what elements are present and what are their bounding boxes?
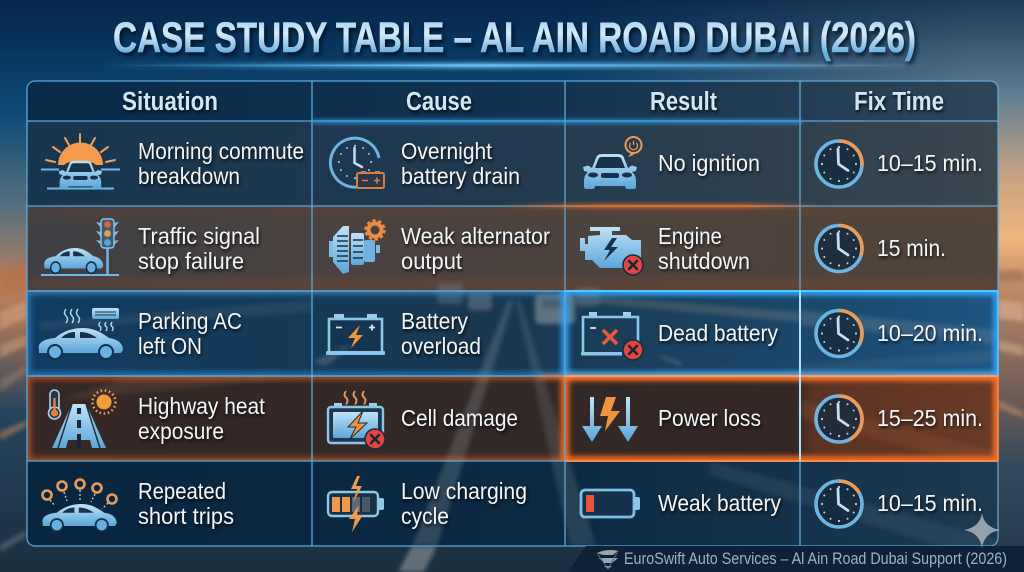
table body text: cycle — [401, 503, 449, 529]
row 3 blue glow — [27, 291, 998, 376]
table body text: Parking AC — [138, 308, 242, 334]
column headers: Situation — [122, 88, 218, 116]
table body text: breakdown — [138, 163, 240, 189]
table body text: Weak alternator — [401, 223, 550, 249]
table body text: Dead battery — [658, 320, 778, 346]
icon: dead battery — [581, 312, 643, 360]
icon: car with parking AC — [39, 308, 123, 359]
icon: clock 10–15 min bottom — [816, 481, 862, 527]
icon: highway heat — [48, 390, 116, 448]
highlight glow lines — [312, 120, 999, 462]
table body text: Low charging — [401, 478, 527, 504]
icon: clock 10–20 min — [816, 310, 862, 356]
icon: sunrise car — [41, 134, 120, 189]
table body text: Cell damage — [401, 405, 518, 431]
table body text: Morning commute — [138, 138, 304, 164]
icon: low charging battery — [328, 476, 384, 532]
table body text: shutdown — [658, 248, 750, 274]
table body text: 10–15 min. — [877, 490, 983, 516]
row 4 orange glow — [27, 376, 998, 461]
icon: power loss arrows — [582, 397, 638, 442]
table body text: 15 min. — [877, 235, 946, 261]
table body text: overload — [401, 333, 481, 359]
icon: overloaded battery — [326, 314, 385, 355]
footer band — [568, 546, 1024, 572]
table row backgrounds — [27, 81, 998, 546]
table body text: stop failure — [138, 248, 244, 274]
icon: clock 10–15 min — [816, 141, 862, 187]
icon: damaged battery with heat — [328, 391, 385, 449]
icon: overnight clock with battery — [330, 138, 384, 188]
table body text: battery drain — [401, 163, 520, 189]
table body text: Overnight — [401, 138, 492, 164]
table body text: left ON — [138, 333, 202, 359]
distant cars and road through the table — [40, 284, 998, 546]
column headers: Fix Time — [854, 88, 944, 116]
column headers: Cause — [406, 88, 472, 116]
icon: repeated trips car — [42, 480, 117, 531]
column headers — [122, 88, 944, 116]
table body text: Highway heat — [138, 393, 265, 419]
icon: EuroSwift logo — [597, 550, 618, 569]
table body text: 15–25 min. — [877, 405, 983, 431]
table body text: Traffic signal — [138, 223, 260, 249]
icon: sparkle watermark — [964, 513, 1000, 548]
table body text: short trips — [138, 503, 234, 529]
table body text: Power loss — [658, 405, 761, 431]
table body text: 10–20 min. — [877, 320, 983, 346]
table body text: Battery — [401, 308, 468, 334]
icon: car at traffic signal — [41, 219, 119, 275]
table body text: 10–15 min. — [877, 150, 983, 176]
table body text: Repeated — [138, 478, 226, 504]
table body text: output — [401, 248, 462, 274]
icon: engine warning — [580, 227, 643, 275]
icon: clock 15–25 min — [816, 396, 862, 442]
icon: alternator with gear — [329, 220, 384, 274]
table body text: Engine — [658, 223, 722, 249]
table body text — [138, 138, 983, 529]
title underline glow — [100, 63, 930, 68]
icon: weak battery — [581, 490, 640, 517]
table body text: exposure — [138, 418, 224, 444]
table body text: Weak battery — [658, 490, 781, 516]
icon: clock 15 min — [816, 226, 862, 272]
icon: result car no ignition — [583, 137, 642, 189]
table body text: No ignition — [658, 150, 760, 176]
table grid — [27, 81, 998, 546]
panel: case study table — [27, 81, 999, 546]
column headers: Result — [650, 88, 717, 116]
